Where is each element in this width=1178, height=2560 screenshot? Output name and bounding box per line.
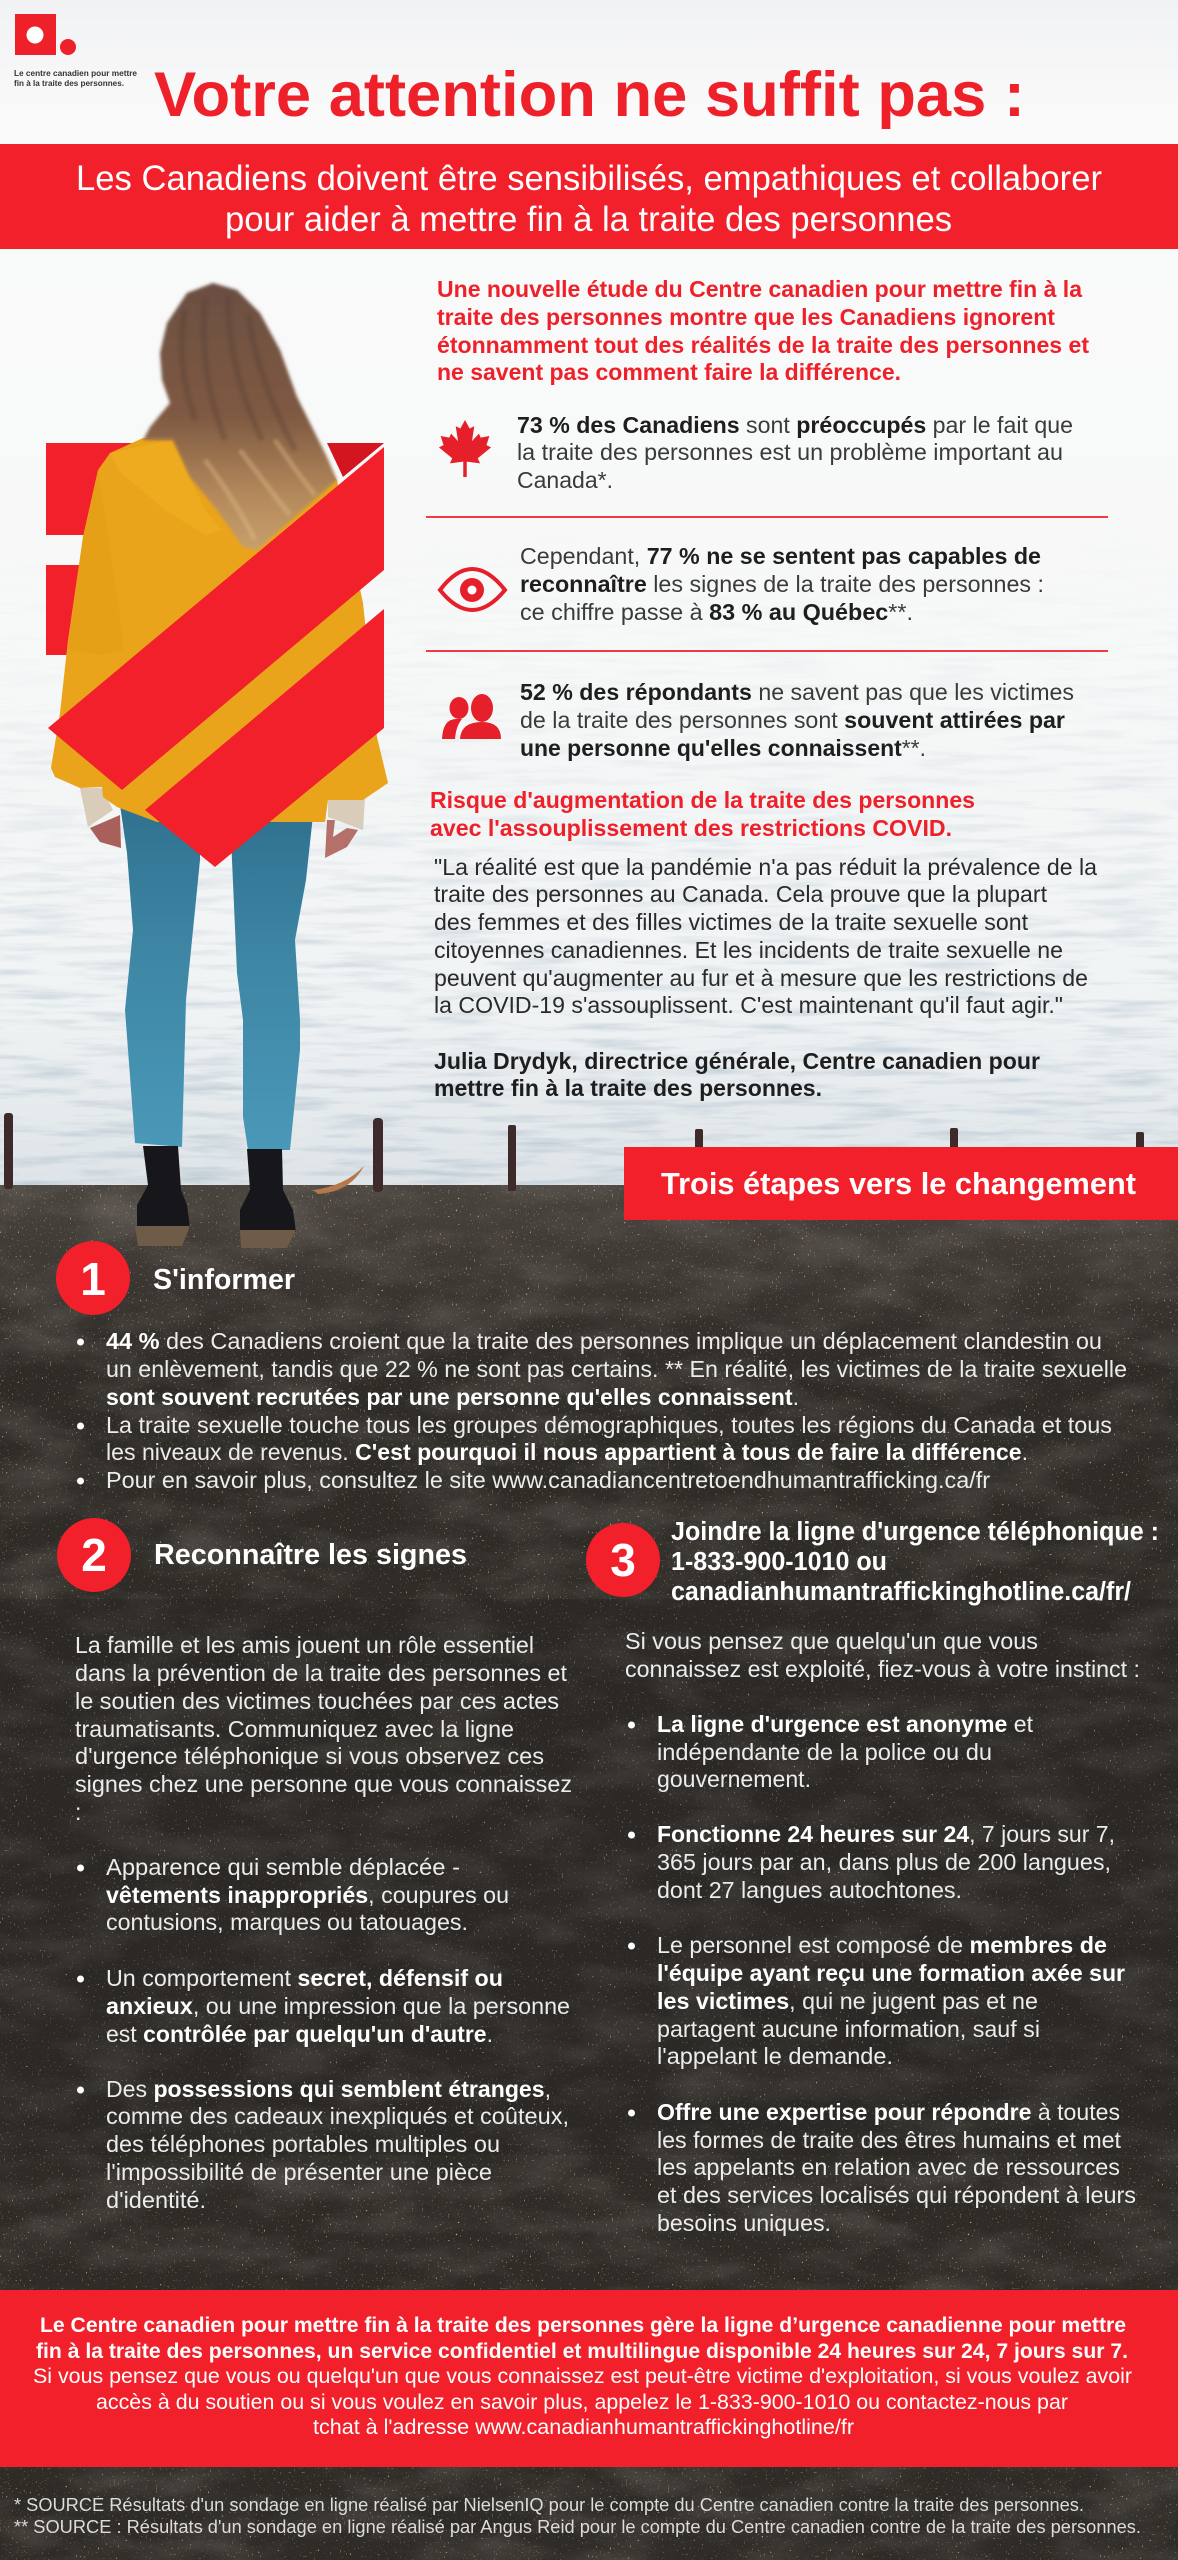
step 3 heading: 1-833-900-1010 ou bbox=[671, 1548, 887, 1576]
footer call to action bbox=[0, 2290, 1178, 2467]
step 3 bullets: partagent aucune information, sauf si bbox=[657, 2016, 1040, 2042]
intro paragraph: traite des personnes montre que les Canadiens ignorent bbox=[437, 304, 1055, 330]
quote: traite des personnes au Canada. Cela prouve que la plupart bbox=[434, 881, 1048, 907]
sources bbox=[14, 2495, 1141, 2537]
step 3 paragraph: connaissez est exploité, fiez-vous à votre instinct : bbox=[625, 1656, 1140, 1682]
quote: la COVID-19 s'assouplissent. C'est maintenant qu'il faut agir." bbox=[434, 992, 1063, 1018]
step 2 bullets bbox=[77, 1854, 570, 2213]
stat: 52 % of respondents bbox=[442, 679, 1074, 761]
sources: * SOURCE Résultats d'un sondage en ligne réalisé par NielsenIQ pour le compte du Centre canadien contre la traite des personnes. bbox=[14, 2495, 1084, 2515]
step 3 bullets: et des services localisés qui répondent à leurs bbox=[657, 2182, 1136, 2208]
stat text: Cependant, 77 % ne se sentent pas capables de bbox=[520, 543, 1041, 569]
step 2 bullets: Des possessions qui semblent étranges, bbox=[106, 2076, 551, 2102]
step 3 bullets: l'équipe ayant reçu une formation axée sur bbox=[657, 1960, 1125, 1986]
step 3 bullets: l'appelant le demande. bbox=[657, 2043, 893, 2069]
step 2 paragraph: signes chez une personne que vous connaissez bbox=[75, 1771, 572, 1797]
step 2 bullets: Un comportement secret, défensif ou bbox=[106, 1965, 503, 1991]
step 3 bullets: les formes de traite des êtres humains et met bbox=[657, 2127, 1122, 2153]
quote: des femmes et des filles victimes de la traite sexuelle sont bbox=[434, 909, 1029, 935]
intro paragraph: ne savent pas comment faire la différence. bbox=[437, 359, 901, 385]
yellow jacket bbox=[51, 438, 388, 822]
step 1 bullets: 44 % des Canadiens croient que la traite des personnes implique un déplacement clandestin ou bbox=[106, 1328, 1102, 1354]
intro paragraph: Une nouvelle étude du Centre canadien pour mettre fin à la bbox=[437, 276, 1082, 302]
title: Votre attention ne suffit pas : bbox=[154, 60, 1025, 130]
step 2 paragraph: traumatisants. Communiquez avec la ligne bbox=[75, 1716, 514, 1742]
quote bbox=[434, 854, 1097, 1018]
jeans bbox=[120, 805, 313, 1150]
step 1 bullets bbox=[77, 1328, 1127, 1493]
icon: eye bbox=[440, 569, 505, 610]
step 3 bullets: Fonctionne 24 heures sur 24, 7 jours sur 7, bbox=[657, 1821, 1115, 1847]
logo bbox=[14, 14, 137, 88]
step 3 heading: Joindre la ligne d'urgence téléphonique : bbox=[671, 1518, 1159, 1546]
hands and cuffs bbox=[80, 788, 365, 858]
quote attribution bbox=[434, 1048, 1040, 1101]
quote: "La réalité est que la pandémie n'a pas réduit la prévalence de la bbox=[434, 854, 1097, 880]
stat: 77 % cannot recognize bbox=[440, 543, 1044, 625]
stat text: reconnaître les signes de la traite des personnes : bbox=[520, 571, 1044, 597]
step 2 bullets: l'impossibilité de présenter une pièce bbox=[106, 2159, 492, 2185]
banner: three steps bbox=[624, 1147, 1178, 1220]
step 2 bullets: d'identité. bbox=[106, 2187, 206, 2213]
subtitle banner: Les Canadiens doivent être sensibilisés, empathiques et collaborer bbox=[76, 159, 1102, 198]
stat text bbox=[520, 543, 1044, 625]
step 2 paragraph: dans la prévention de la traite des personnes et bbox=[75, 1660, 568, 1686]
step 3 bullets: dont 27 langues autochtones. bbox=[657, 1877, 962, 1903]
sources: ** SOURCE : Résultats d'un sondage en ligne réalisé par Angus Reid pour le compte du Centre canadien contre de la traite des personnes. bbox=[14, 2517, 1141, 2537]
boots bbox=[135, 1146, 296, 1248]
stat text bbox=[520, 679, 1074, 761]
stat text: de la traite des personnes sont souvent attirées par bbox=[520, 707, 1065, 733]
step 2 heading bbox=[57, 1518, 467, 1592]
step 3 paragraph: Si vous pensez que quelqu'un que vous bbox=[625, 1628, 1038, 1654]
step 1 bullets: un enlèvement, tandis que 22 % ne sont pas certains. ** En réalité, les victimes de la traite sexuelle bbox=[106, 1356, 1127, 1382]
step 2 paragraph: le soutien des victimes touchées par ces actes bbox=[75, 1688, 559, 1714]
step 1 heading: S'informer bbox=[153, 1264, 295, 1296]
step 2 bullets: est contrôlée par quelqu'un d'autre. bbox=[106, 2021, 493, 2047]
footer call to action: Si vous pensez que vous ou quelqu'un que vous connaissez est peut-être victime d'exploitation, si vous voulez avoir bbox=[33, 2365, 1132, 2388]
stat text: Canada*. bbox=[517, 467, 613, 493]
intro paragraph: étonnamment tout des réalités de la traite des personnes et bbox=[437, 332, 1089, 358]
step 3 paragraph bbox=[625, 1628, 1140, 1682]
quote attribution: mettre fin à la traite des personnes. bbox=[434, 1075, 822, 1101]
footer call to action: fin à la traite des personnes, un service confidentiel et multilingue disponible 24 heures sur 24, 7 jours sur 7. bbox=[36, 2340, 1128, 2363]
step 3 heading: 3 bbox=[610, 1534, 636, 1586]
step 2 paragraph: : bbox=[75, 1799, 81, 1825]
step 3 bullets: indépendante de la police ou du bbox=[657, 1739, 992, 1765]
quote: peuvent qu'augmenter au fur et à mesure que les restrictions de bbox=[434, 965, 1088, 991]
logo text: Le centre canadien pour mettre bbox=[14, 68, 137, 78]
fence posts bbox=[4, 1113, 1144, 1194]
step 3 bullets: Offre une expertise pour répondre à toutes bbox=[657, 2099, 1120, 2125]
background: sky and water photo bbox=[0, 0, 1178, 1190]
step 3 heading: canadianhumantraffickinghotline.ca/fr/ bbox=[671, 1578, 1131, 1606]
step 2 paragraph: d'urgence téléphonique si vous observez ces bbox=[75, 1743, 544, 1769]
subtitle banner: pour aider à mettre fin à la traite des personnes bbox=[225, 200, 952, 239]
step 3 bullets: besoins uniques. bbox=[657, 2210, 831, 2236]
red flag behind the woman bbox=[46, 443, 384, 655]
step 3 bullets: La ligne d'urgence est anonyme et bbox=[657, 1711, 1034, 1737]
quote: citoyennes canadiennes. Et les incidents de traite sexuelle ne bbox=[434, 937, 1063, 963]
step 3 bullets bbox=[628, 1711, 1136, 2236]
subtitle banner bbox=[0, 144, 1178, 249]
step 1 bullets: La traite sexuelle touche tous les groupes démographiques, toutes les régions du Canada et tous bbox=[106, 1412, 1112, 1438]
footer call to action: Le Centre canadien pour mettre fin à la traite des personnes gère la ligne d’urgence canadienne pour mettre bbox=[40, 2314, 1126, 2337]
step 3 bullets: gouvernement. bbox=[657, 1766, 811, 1792]
stat text: ce chiffre passe à 83 % au Québec**. bbox=[520, 599, 913, 625]
stat text: 52 % des répondants ne savent pas que les victimes bbox=[520, 679, 1074, 705]
stat text bbox=[517, 412, 1073, 493]
step 2 bullets: vêtements inappropriés, coupures ou bbox=[106, 1882, 509, 1908]
quote attribution: Julia Drydyk, directrice générale, Centre canadien pour bbox=[434, 1048, 1040, 1074]
stat text: la traite des personnes est un problème important au bbox=[517, 439, 1063, 465]
stat text: une personne qu'elles connaissent**. bbox=[520, 735, 926, 761]
step 2 bullets: contusions, marques ou tatouages. bbox=[106, 1909, 468, 1935]
step 2 paragraph bbox=[75, 1632, 572, 1825]
step 2 heading: 2 bbox=[81, 1529, 107, 1581]
step 2 heading: Reconnaître les signes bbox=[154, 1539, 467, 1571]
step 3 heading bbox=[586, 1518, 1159, 1606]
banner: three steps: Trois étapes vers le changement bbox=[661, 1167, 1136, 1201]
step 2 bullets: comme des cadeaux inexpliqués et coûteux, bbox=[106, 2103, 569, 2129]
stat: 73 % concerned bbox=[439, 412, 1073, 493]
intro paragraph bbox=[437, 276, 1089, 385]
step 2 bullets: Apparence qui semble déplacée - bbox=[106, 1854, 460, 1880]
step 1 bullets: les niveaux de revenus. C'est pourquoi il nous appartient à tous de faire la différence. bbox=[106, 1439, 1028, 1465]
heading: COVID risk: Risque d'augmentation de la traite des personnes bbox=[430, 787, 975, 813]
icon: people bbox=[442, 694, 501, 739]
background: dark ground texture bbox=[0, 1185, 1178, 2560]
heading: COVID risk bbox=[430, 787, 975, 841]
step 1 bullets: sont souvent recrutées par une personne qu'elles connaissent. bbox=[106, 1384, 799, 1410]
logo text: fin à la traite des personnes. bbox=[14, 78, 124, 88]
stat text: 73 % des Canadiens sont préoccupés par le fait que bbox=[517, 412, 1073, 438]
hair bbox=[143, 283, 337, 550]
icon: maple leaf bbox=[439, 420, 491, 477]
step 3 bullets: les appelants en relation avec de ressources bbox=[657, 2154, 1120, 2180]
step 3 bullets: 365 jours par an, dans plus de 200 langues, bbox=[657, 1849, 1111, 1875]
step 2 paragraph: La famille et les amis jouent un rôle essentiel bbox=[75, 1632, 534, 1658]
step 1 bullets: Pour en savoir plus, consultez le site www.canadiancentretoendhumantrafficking.ca/fr bbox=[106, 1467, 990, 1493]
step 2 bullets: anxieux, ou une impression que la personne bbox=[106, 1993, 570, 2019]
logo text bbox=[14, 68, 137, 88]
footer call to action: tchat à l'adresse www.canadianhumantraffickinghotline/fr bbox=[313, 2416, 854, 2439]
logo mark bbox=[15, 14, 76, 55]
step 1 heading bbox=[56, 1241, 295, 1315]
illustration: woman in yellow jacket with red ribbon bbox=[46, 283, 388, 1248]
step 1 heading: 1 bbox=[80, 1253, 106, 1305]
footer call to action: accès à du soutien ou si vous voulez en savoir plus, appelez le 1-833-900-1010 ou contactez-nous par bbox=[96, 2391, 1068, 2414]
red diagonal ribbon bbox=[48, 447, 384, 867]
step 2 bullets: des téléphones portables multiples ou bbox=[106, 2131, 500, 2157]
heading: COVID risk: avec l'assouplissement des restrictions COVID. bbox=[430, 815, 952, 841]
step 3 bullets: les victimes, qui ne jugent pas et ne bbox=[657, 1988, 1038, 2014]
step 3 bullets: Le personnel est composé de membres de bbox=[657, 1932, 1107, 1958]
